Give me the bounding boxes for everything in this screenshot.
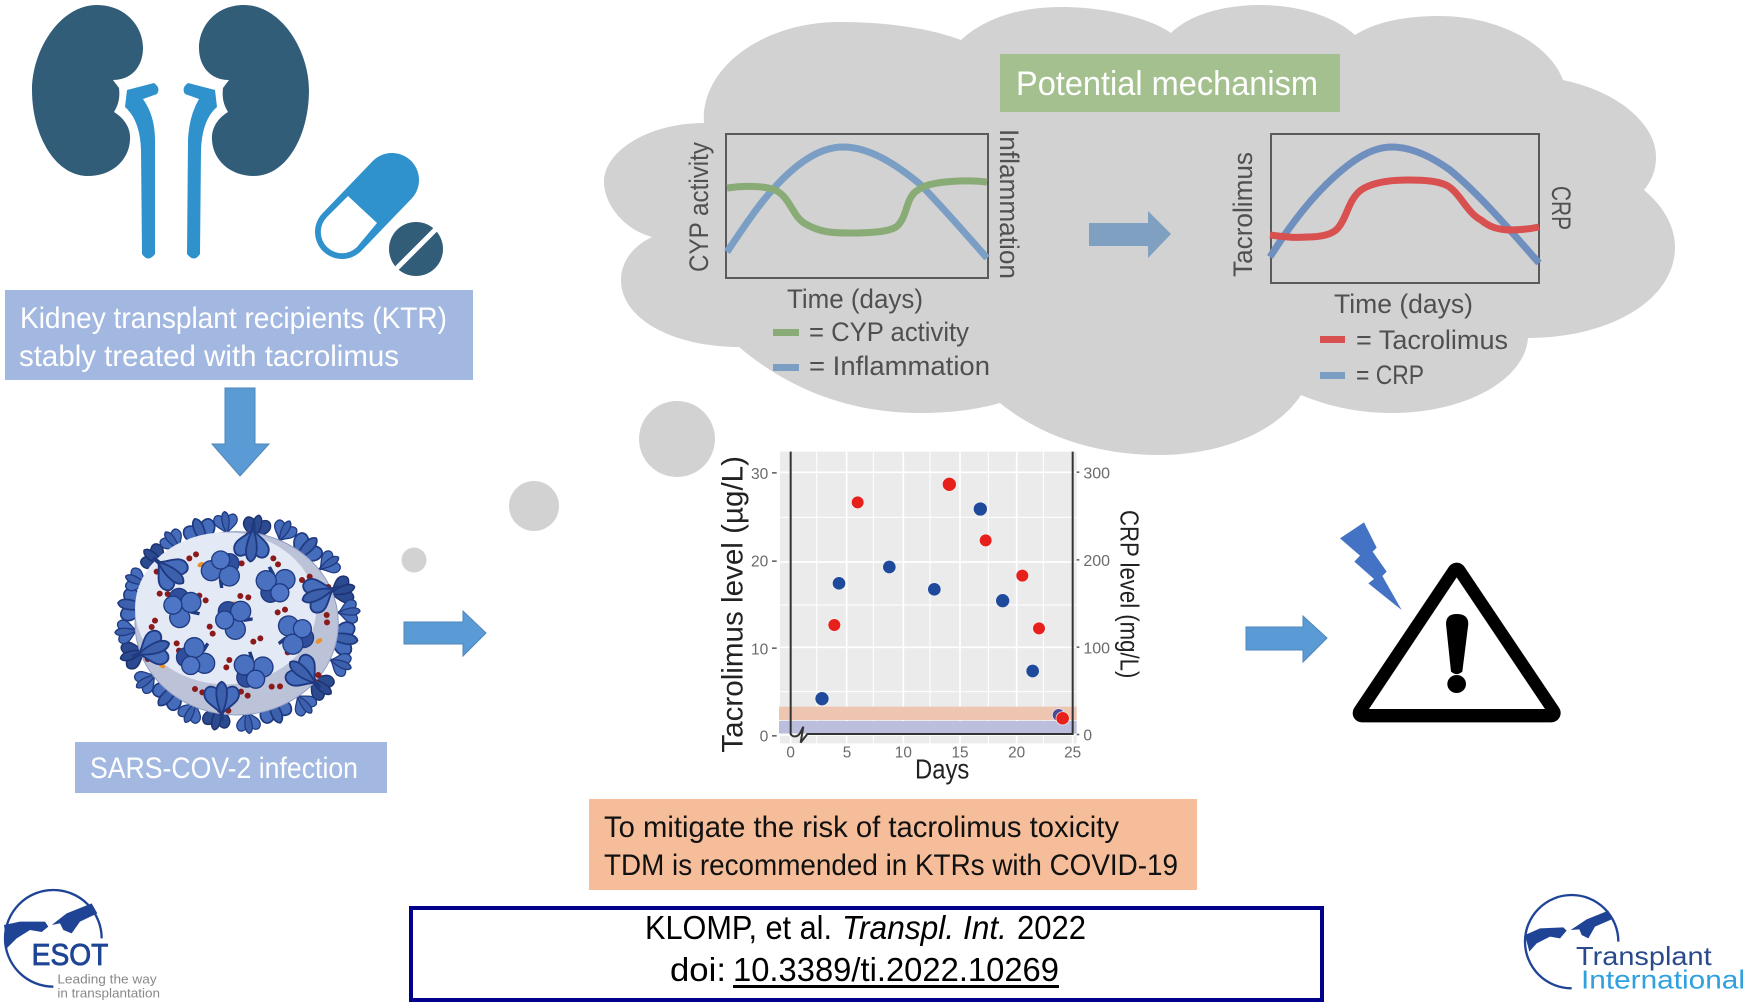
chart: CYP activity vs inflammation: Time (days) [787, 284, 923, 314]
chart: tacrolimus vs CRP: Time (days) [1334, 289, 1473, 319]
logo: ESOT [4, 890, 160, 1000]
logo: ESOT: in transplantation [57, 985, 160, 1000]
reference ranges [779, 707, 1077, 733]
left axis ticks: 30 [751, 466, 768, 483]
chart: CYP activity vs inflammation: Inflammation [994, 129, 1024, 279]
thought bubble: medium [509, 481, 559, 531]
conclusion box: recommendation [589, 799, 1197, 890]
left axis ticks: 0 [760, 729, 768, 746]
thought bubble: large [639, 401, 715, 477]
left kidney [32, 5, 143, 176]
chart: tacrolimus and CRP levels over days [717, 452, 1145, 784]
arrow: down [212, 388, 269, 476]
axis titles: CRP level (mg/L) [1115, 510, 1145, 678]
icon: lightning bolt [1340, 522, 1402, 610]
tablet [389, 222, 443, 276]
conclusion box: recommendation: TDM is recommended in KTRs with COVID-19 [604, 849, 1178, 882]
logo: Transplant International [1525, 895, 1745, 994]
label box: kidney transplant recipients: stably treated with tacrolimus [19, 340, 399, 373]
chart: CYP activity vs inflammation: CYP activity [684, 142, 714, 272]
label box: SARS-COV-2 infection [75, 742, 387, 793]
label box: kidney transplant recipients [5, 290, 473, 380]
legend: tacrolimus and CRP: = CRP [1356, 360, 1424, 390]
x axis ticks: 0 [786, 744, 795, 761]
right axis ticks: 300 [1083, 465, 1110, 482]
left ureter [125, 83, 158, 258]
thought bubble: small [402, 548, 426, 572]
tacrolimus points [828, 477, 1069, 725]
icon: kidneys and ureters [32, 5, 309, 258]
axis titles [717, 456, 1145, 784]
arrow: virus to chart [404, 611, 486, 656]
plot background and grid [780, 452, 1077, 743]
legend: CYP activity and inflammation: = CYP activity [809, 317, 969, 347]
citation box: 2022 [1017, 909, 1086, 946]
capsule [321, 180, 392, 253]
chart: CYP activity vs inflammation [684, 129, 1024, 314]
outer spikes [114, 510, 361, 735]
chart: tacrolimus vs CRP: Tacrolimus [1228, 152, 1258, 277]
x axis ticks: 5 [843, 744, 851, 761]
citation box: Transpl. Int. [842, 909, 1007, 946]
citation box: doi: [670, 951, 726, 988]
x axis ticks: 10 [895, 744, 912, 761]
conclusion box: recommendation: To mitigate the risk of tacrolimus toxicity [604, 811, 1119, 844]
axis titles: Tacrolimus level (µg/L) [717, 456, 750, 753]
right axis ticks: 0 [1083, 728, 1092, 745]
right ureter [184, 83, 217, 258]
x axis ticks: 15 [951, 744, 969, 761]
x axis ticks: 20 [1008, 744, 1025, 761]
axis titles: Days [915, 753, 969, 784]
right axis ticks: 200 [1083, 553, 1110, 570]
right axis ticks [1077, 465, 1110, 745]
arrow: chart to warning [1246, 616, 1327, 662]
logo: ESOT: Leading the way [57, 971, 157, 986]
x axis ticks [786, 744, 1081, 761]
arrow: between mechanism charts [1089, 211, 1171, 258]
logo: ESOT: ESOT [32, 938, 109, 972]
left axis ticks [751, 466, 777, 746]
thought cloud: potential mechanism [604, 5, 1675, 455]
left axis ticks: 20 [751, 554, 768, 571]
axes with break [791, 452, 1073, 743]
icon: warning triangle [1362, 572, 1551, 713]
heading: potential mechanism [1000, 54, 1340, 112]
logo: Transplant International: Transplant [1576, 941, 1713, 971]
CRP points [815, 502, 1065, 721]
surface spikes [126, 521, 345, 721]
citation box [411, 908, 1322, 1000]
x axis ticks: 25 [1064, 744, 1081, 761]
red and orange surface particles [140, 532, 331, 714]
label box: SARS-COV-2 infection: SARS-COV-2 infection [90, 752, 358, 785]
icon: coronavirus [114, 510, 361, 735]
legend: CYP activity and inflammation [773, 317, 990, 381]
heading: potential mechanism: Potential mechanism [1016, 65, 1318, 103]
right axis ticks: 100 [1083, 640, 1110, 657]
legend: CYP activity and inflammation: = Inflammation [809, 351, 990, 381]
citation box: 10.3389/ti.2022.10269 [733, 951, 1059, 988]
virus body [135, 532, 338, 715]
legend: tacrolimus and CRP: = Tacrolimus [1356, 325, 1508, 355]
logo: Transplant International: International [1581, 964, 1745, 994]
chart: tacrolimus vs CRP: CRP [1546, 186, 1576, 230]
icon: capsule and tablet [321, 180, 443, 276]
legend: tacrolimus and CRP [1320, 325, 1508, 390]
left axis ticks: 10 [751, 641, 768, 658]
label box: kidney transplant recipients: Kidney transplant recipients (KTR) [20, 302, 447, 335]
citation box: KLOMP, et al. [645, 909, 832, 946]
chart: tacrolimus vs CRP [1228, 134, 1576, 319]
right kidney [199, 5, 309, 176]
